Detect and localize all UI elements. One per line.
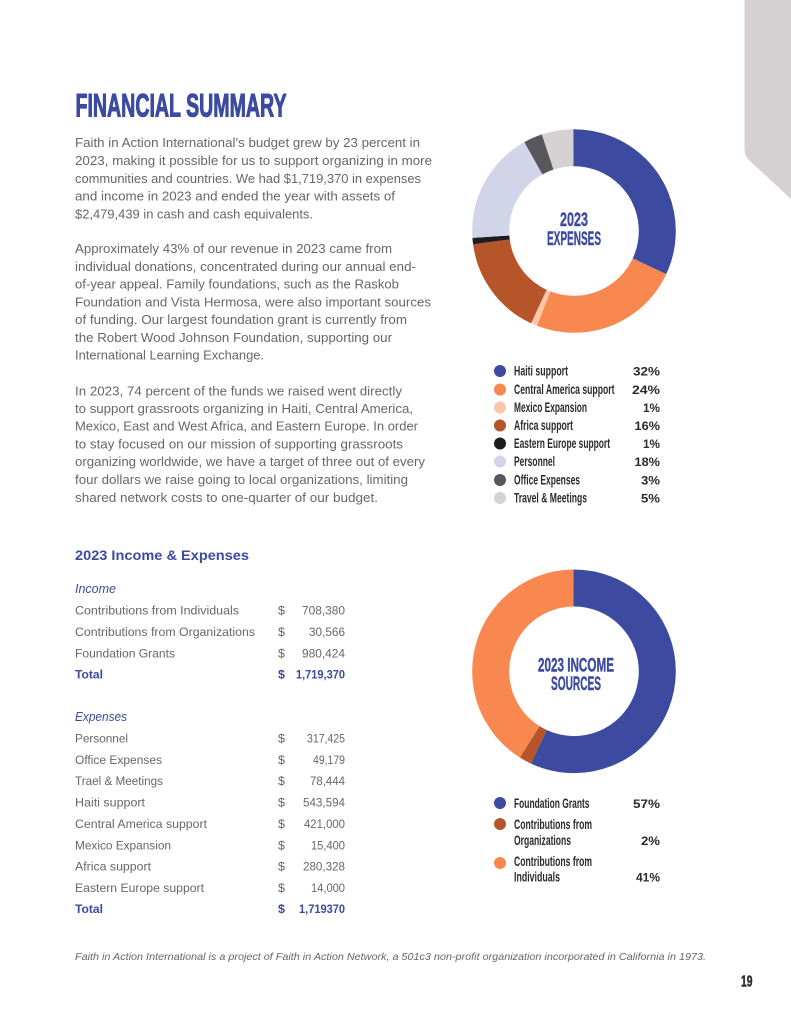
text block: revenue sources: the Robert Wood Johnson Foundation, supporting our <box>75 330 393 345</box>
table: expenses: 15,400 <box>311 838 345 852</box>
text block: use of funds: shared network costs to one-quarter of our budget. <box>75 490 378 505</box>
table: expenses: $ <box>278 817 285 831</box>
table: expenses: 78,444 <box>310 774 345 788</box>
table: expenses: 543,594 <box>303 796 345 810</box>
text block: budget overview: $2,479,439 in cash and cash equivalents. <box>75 206 313 221</box>
donut label: 2023 income sources <box>538 654 614 695</box>
table: expenses: 49,179 <box>313 753 345 767</box>
legend: expenses: Haiti support <box>514 364 568 378</box>
text block: use of funds: to stay focused on our mission of supporting grassroots <box>75 436 403 452</box>
table: expenses: Total <box>75 902 103 916</box>
table: expenses: $ <box>278 774 285 788</box>
table: expenses: Office Expenses <box>75 753 162 767</box>
table: expenses: Mexico Expansion <box>75 838 171 852</box>
text block: revenue sources <box>75 241 431 362</box>
legend: income sources: 41% <box>636 870 660 884</box>
legend: expenses: 1% <box>643 437 660 451</box>
text block: use of funds: to support grassroots organizing in Haiti, Central America, <box>75 401 413 416</box>
table: income: $ <box>278 668 285 682</box>
legend: expenses: 16% <box>634 419 660 433</box>
legend: expenses <box>494 364 660 506</box>
text block: use of funds: Mexico, East and West Africa, and Eastern Europe. In order <box>75 419 419 434</box>
legend: expenses: Office Expenses <box>514 472 580 488</box>
text block: use of funds: organizing worldwide, we have a target of three out of every <box>75 454 425 469</box>
footnote: Faith in Action International is a project of Faith in Action Network, a 501c3 non-profit organization incorporated in California in 1973. <box>75 951 706 963</box>
legend: expenses: Personnel <box>514 454 555 469</box>
legend: expenses: Africa support <box>514 418 573 433</box>
legend: income sources <box>494 796 660 884</box>
legend: income sources: Contributions from <box>514 817 592 832</box>
table: expenses: Central America support <box>75 817 208 831</box>
table: expenses: Eastern Europe support <box>75 881 205 895</box>
donut chart: 2023 income sources <box>491 588 657 755</box>
legend: income sources: Contributions from <box>514 854 592 869</box>
legend: expenses: 24% <box>632 383 660 397</box>
legend: expenses: 3% <box>641 474 660 488</box>
table: income: Income <box>75 582 116 596</box>
table: income: Foundation Grants <box>75 646 175 660</box>
legend: expenses: 32% <box>633 364 660 378</box>
page number: 19 <box>741 974 753 990</box>
text block: budget overview: Faith in Action International’s budget grew by 23 percent in <box>75 135 420 150</box>
table: expenses: 317,425 <box>307 732 345 746</box>
table: income: Total <box>75 668 103 682</box>
text block: revenue sources: of funding. Our largest foundation grant is currently from <box>75 312 407 327</box>
text block: use of funds <box>75 383 425 505</box>
legend: income sources: 2% <box>641 834 660 848</box>
donut label: 2023 income sources: SOURCES <box>551 673 601 695</box>
legend: expenses: Travel & Meetings <box>514 490 587 506</box>
table: income: $ <box>278 625 285 639</box>
legend: income sources: 57% <box>633 797 660 811</box>
table: expenses: Haiti support <box>75 796 146 810</box>
text block: revenue sources: individual donations, concentrated during our annual end- <box>75 259 416 274</box>
table: expenses: Trael & Meetings <box>75 774 163 788</box>
text block: revenue sources: Approximately 43% of our revenue in 2023 came from <box>75 241 392 256</box>
table: expenses: $ <box>278 881 285 895</box>
table: expenses: $ <box>278 860 285 874</box>
legend: income sources: Organizations <box>514 833 571 848</box>
legend: expenses: 5% <box>641 492 660 506</box>
table: income: Contributions from Organizations <box>75 625 255 639</box>
decorative corner tab <box>744 0 791 199</box>
donut label: 2023 expenses: EXPENSES <box>547 228 601 250</box>
table: expenses: Africa support <box>75 860 152 874</box>
table: expenses: 421,000 <box>304 817 345 831</box>
table: expenses: $ <box>278 902 285 916</box>
table: expenses: 1,719370 <box>299 902 345 916</box>
donut label: 2023 expenses: 2023 <box>560 209 588 231</box>
table: expenses: $ <box>278 753 285 767</box>
table: expenses: Personnel <box>75 732 128 746</box>
table: income: 30,566 <box>309 625 345 639</box>
text block: budget overview: and income in 2023 and ended the year with assets of <box>75 188 395 204</box>
table: expenses: Expenses <box>75 710 128 724</box>
text block: revenue sources: of-year appeal. Family foundations, such as the Raskob <box>75 277 399 292</box>
legend: expenses: Mexico Expansion <box>514 400 587 415</box>
table: expenses: 14,000 <box>311 881 345 895</box>
legend: expenses: Eastern Europe support <box>514 436 610 451</box>
table: income: $ <box>278 646 285 660</box>
table: income: Contributions from Individuals <box>75 604 239 618</box>
legend: income sources: Foundation Grants <box>514 796 590 811</box>
table: income <box>75 582 345 682</box>
table: income: 980,424 <box>302 646 345 660</box>
legend: expenses: 1% <box>643 401 660 415</box>
text block: budget overview <box>75 135 432 221</box>
text block: budget overview: 2023, making it possible for us to support organizing in more <box>75 153 432 168</box>
legend: income sources: Individuals <box>514 870 560 884</box>
text block: use of funds: four dollars we raise going to local organizations, limiting <box>75 472 408 487</box>
text block: revenue sources: International Learning Exchange. <box>75 348 264 362</box>
table: expenses: 280,328 <box>303 860 345 874</box>
table: expenses: $ <box>278 796 285 810</box>
donut label: 2023 income sources: 2023 INCOME <box>538 654 614 676</box>
table: income: 708,380 <box>302 604 345 618</box>
table: income: 1,719,370 <box>296 668 345 682</box>
table heading: 2023 Income & Expenses <box>75 548 249 563</box>
text block: revenue sources: Foundation and Vista Hermosa, were also important sources <box>75 294 431 309</box>
donut label: 2023 expenses <box>547 209 601 250</box>
legend: expenses: Central America support <box>514 382 615 397</box>
table: expenses: $ <box>278 838 285 852</box>
donut chart: 2023 expenses <box>491 148 657 314</box>
table: income: $ <box>278 604 285 618</box>
table: expenses: $ <box>278 732 285 746</box>
text block: budget overview: communities and countries. We had $1,719,370 in expenses <box>75 171 421 186</box>
legend: expenses: 18% <box>634 455 660 469</box>
title: FINANCIAL SUMMARY <box>76 87 287 123</box>
text block: use of funds: In 2023, 74 percent of the funds we raised went directly <box>75 383 402 398</box>
table: expenses <box>75 710 345 916</box>
